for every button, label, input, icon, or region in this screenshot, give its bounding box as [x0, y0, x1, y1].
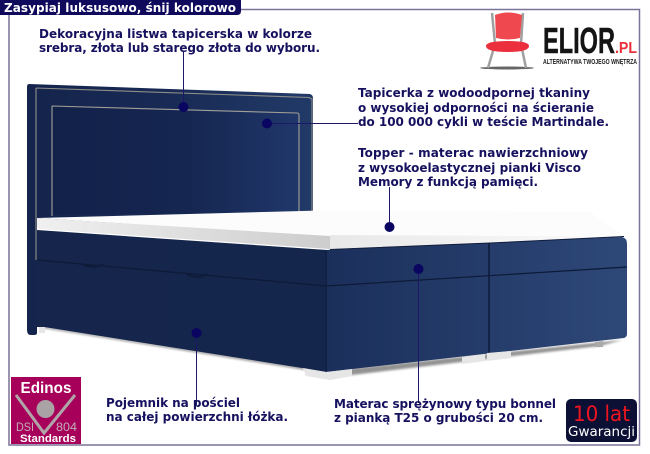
badge: 10 year warranty: 10 lat — [573, 402, 630, 426]
callout: topper: z wysokoelastycznej pianki Visco — [358, 161, 581, 175]
callout: upholstery: Tapicerka z wodoodpornej tkaniny — [358, 86, 590, 100]
callout: bedding container — [106, 328, 288, 424]
badge: Edinos standards — [11, 377, 81, 445]
logo wordmark: ELIOR — [543, 20, 615, 61]
base front — [37, 230, 327, 372]
callout: decorative strip: srebra, złota lub starego złota do wyboru. — [39, 41, 320, 55]
badge: 10 year warranty — [566, 399, 637, 442]
badge: Edinos standards: Edinos — [20, 380, 72, 397]
callout: upholstery: o wysokiej odporności na ścieranie — [358, 101, 594, 115]
callout: decorative strip — [39, 27, 320, 112]
callout: bedding container: na całej powierzchni łóżka. — [106, 410, 288, 424]
callout: bonnel mattress: z pianką T25 o grubości 20 cm. — [334, 411, 543, 425]
callout: bedding container: Pojemnik na pościel — [106, 396, 240, 410]
feet — [39, 327, 603, 380]
lid seam lines — [37, 243, 627, 372]
badge: Edinos standards: 804 — [56, 420, 77, 434]
headboard — [27, 84, 313, 335]
badge: Edinos standards: Standards — [20, 433, 76, 445]
title banner: Zasypiaj luksusowo, śnij kolorowo — [4, 1, 236, 15]
bed illustration — [27, 84, 627, 380]
logo: Elior — [480, 12, 637, 70]
callout: topper — [358, 146, 588, 232]
logo: Elior: .PL — [615, 40, 637, 57]
base right side — [326, 237, 627, 372]
callout: bonnel mattress: Materac sprężynowy typu bonnel — [334, 397, 556, 411]
callout: topper: Memory z funkcją pamięci. — [358, 175, 538, 189]
topper mattress — [37, 210, 624, 250]
callout: upholstery: do 100 000 cykli w teście Martindale. — [358, 115, 609, 129]
shadow under bed — [40, 326, 622, 375]
badge: Edinos standards: DSI — [16, 420, 34, 434]
callout: bonnel mattress — [334, 264, 556, 425]
callout: decorative strip: Dekoracyjna listwa tapicerska w kolorze — [39, 27, 312, 41]
callout: topper: Topper - materac nawierzchniowy — [358, 146, 588, 160]
callout: upholstery — [262, 86, 609, 129]
badge: 10 year warranty: Gwarancji — [568, 425, 635, 440]
icon: red chair — [480, 12, 534, 70]
